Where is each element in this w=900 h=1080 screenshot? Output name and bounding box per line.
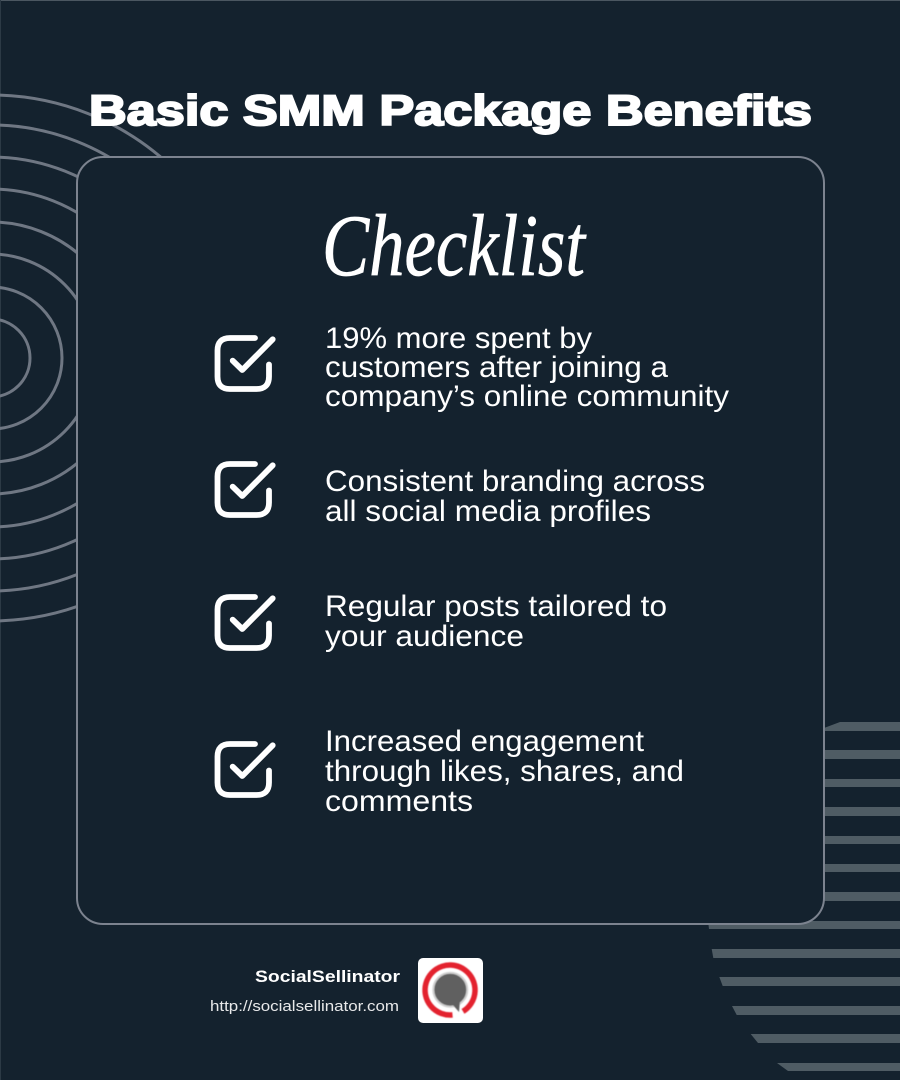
checklist item 4 [218, 725, 684, 818]
item 1 text: 19% more spent by [325, 322, 592, 355]
icon: SocialSellinator logo [418, 958, 483, 1023]
item 1 text: company’s online community [325, 380, 729, 413]
item 3 text: Regular posts tailored to [325, 590, 667, 623]
checklist heading: Checklist [322, 198, 587, 295]
item 2 text: all social media profiles [325, 495, 651, 528]
icon: checkbox [218, 338, 273, 389]
checklist item 3 [218, 590, 667, 653]
icon: checkbox [218, 597, 273, 648]
item 3 text [325, 590, 667, 653]
item 4 text [325, 725, 684, 818]
title: Basic SMM Package Benefits [89, 87, 812, 135]
item 4 text: through likes, shares, and [325, 755, 684, 788]
checklist item 1 [218, 322, 729, 413]
decorative concentric rings [0, 95, 254, 621]
icon: checkbox [218, 744, 273, 795]
item 4 text: Increased engagement [325, 725, 645, 758]
panel: checklist [77, 157, 824, 924]
item 1 text: customers after joining a [325, 351, 668, 384]
decorative striped circle [708, 722, 900, 1071]
item 2 text [325, 465, 705, 528]
panel background [77, 157, 824, 924]
item 3 text: your audience [325, 620, 524, 653]
footer brand name: SocialSellinator [255, 967, 400, 986]
icon: checkbox [218, 464, 273, 515]
item 2 text: Consistent branding across [325, 465, 705, 498]
item 4 text: comments [325, 785, 473, 818]
item 1 text [325, 322, 729, 413]
footer url: http://socialsellinator.com [210, 998, 399, 1015]
checklist item 2 [218, 464, 705, 528]
